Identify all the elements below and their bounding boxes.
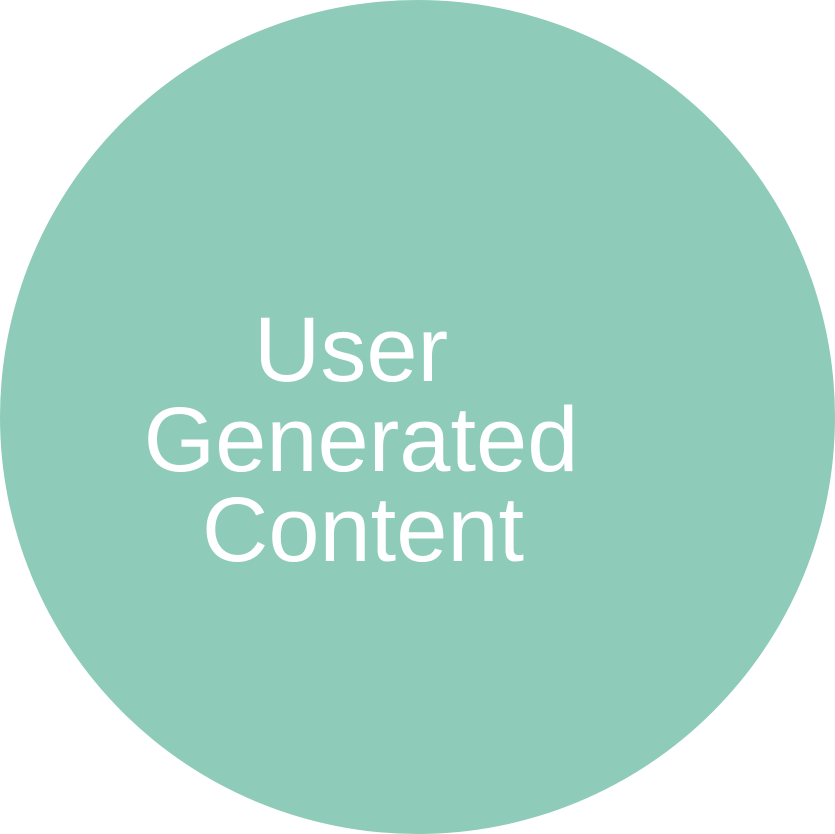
line: User: User xyxy=(254,299,448,401)
line: Content: Content xyxy=(202,479,524,581)
title text xyxy=(144,299,578,581)
line: Generated: Generated xyxy=(144,389,578,491)
